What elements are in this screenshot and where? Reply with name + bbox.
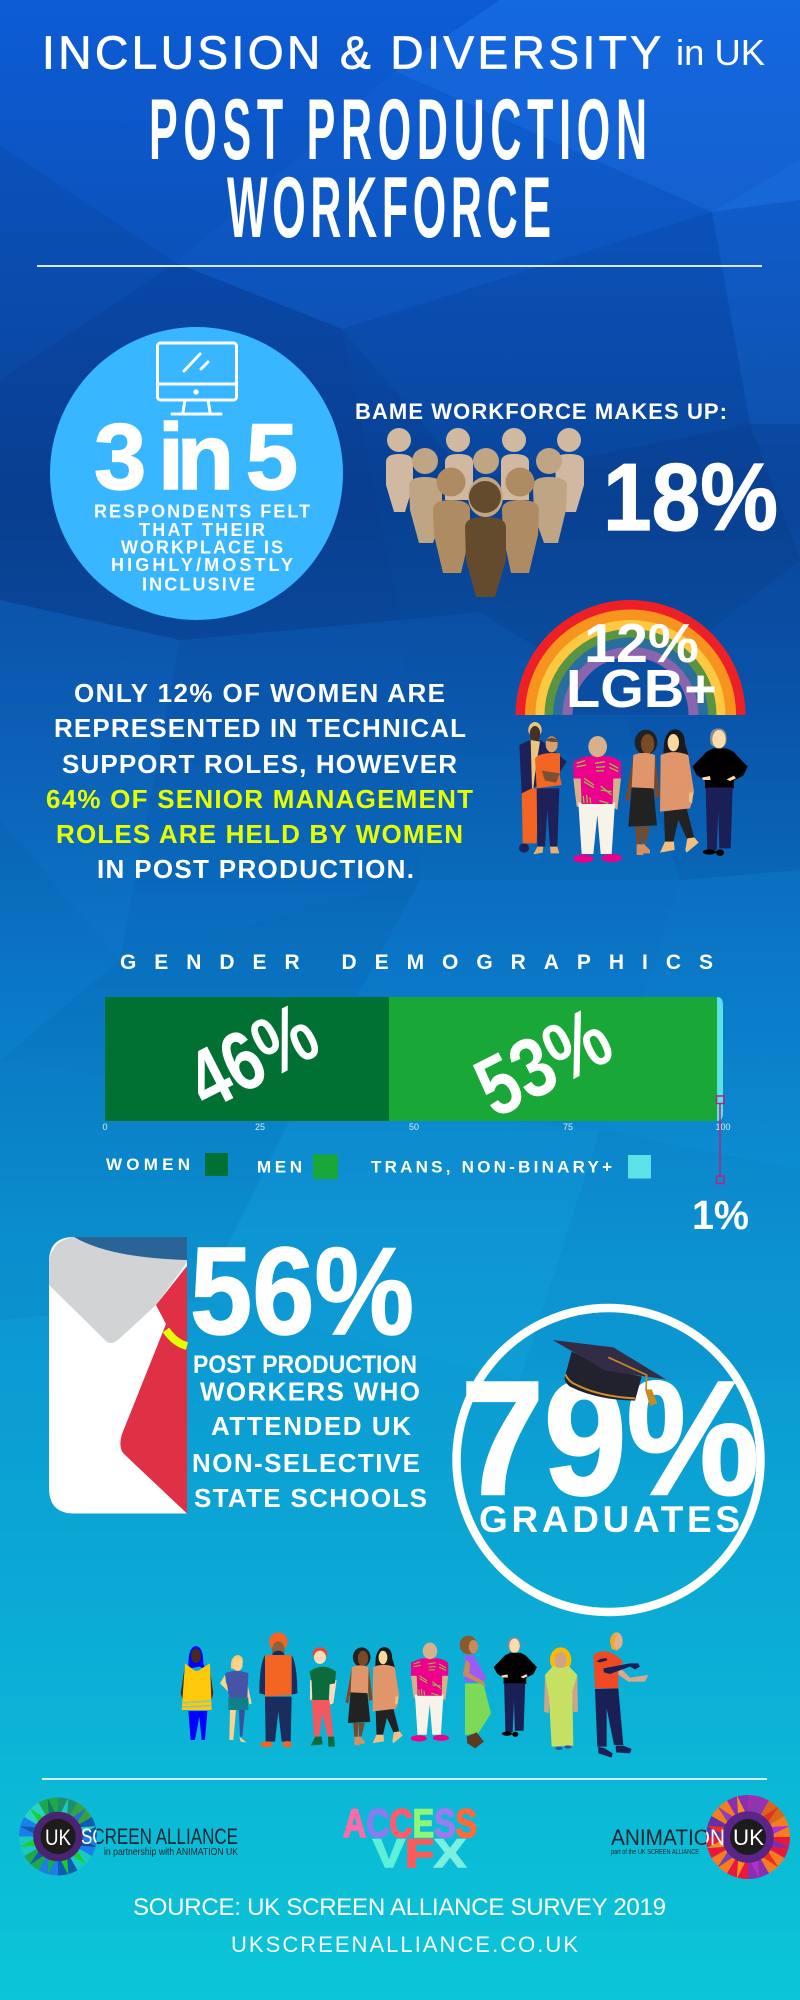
logo: Animation UK (611, 1795, 790, 1879)
legend (106, 1153, 651, 1179)
caption: respondents (94, 502, 310, 594)
heading: gender demographics: GENDER DEMOGRAPHICS (120, 951, 713, 974)
big stat 3 in 5: 3 in 5 (94, 404, 298, 509)
tagline: part of the UK SCREEN ALLIANCE (611, 1849, 699, 1856)
title: post production workforce: POST PRODUCTION (149, 82, 647, 178)
person: man holding baby (533, 736, 562, 854)
person: man with orange turban (259, 1632, 297, 1748)
text block: women in post production: REPRESENTED IN TECHNICAL (54, 713, 466, 743)
ring (456, 1308, 760, 1612)
stat: 79 percent: 79% (461, 1348, 759, 1529)
title: inclusion and diversity in UK: in UK (676, 32, 765, 73)
chart: gender demographics (102, 951, 749, 1238)
axis tick labels: 0 (102, 1122, 108, 1132)
legend: MEN (257, 1158, 302, 1176)
caption: non-selective state schools: NON-SELECTIVE (192, 1448, 420, 1478)
text block: women in post production: 64% OF SENIOR MANAGEMENT (46, 784, 473, 814)
caption: respondents: THAT THEIR (139, 520, 265, 540)
wordmark UK: UK (45, 1825, 71, 1850)
wordmark animation over badge: ANIMATION (611, 1825, 725, 1850)
starburst (19, 1798, 97, 1876)
text block: women in post production: ROLES ARE HELD BY WOMEN (56, 819, 463, 849)
legend: TRANS, NON-BINARY+ (371, 1158, 612, 1176)
icon: computer monitor (158, 343, 236, 414)
wordmark screen alliance: SCREEN ALLIANCE (81, 1824, 238, 1849)
connector: 1 percent callout (716, 1096, 724, 1184)
caption: respondents: HIGHLY/MOSTLY (111, 555, 293, 575)
caption: non-selective state schools: WORKERS WHO (200, 1376, 420, 1406)
text block: women in post production: SUPPORT ROLES, HOWEVER (62, 749, 457, 779)
value: men 53 percent: 53% (460, 989, 626, 1135)
person: girl with prosthetic leg (220, 1655, 252, 1743)
person pair: woman in peach dress (373, 1647, 403, 1743)
text block: women in post production (46, 678, 473, 884)
website: UKSCREENALLIANCE.CO.UK (231, 1932, 578, 1957)
text block: women in post production: IN POST PRODUCTION. (97, 854, 414, 884)
icon: graduation cap (553, 1340, 666, 1406)
person: man in green t-shirt (309, 1647, 337, 1747)
caption: non-selective state schools: POST PRODUCTION (193, 1351, 417, 1379)
light blue circle (50, 327, 343, 620)
stat: 56 percent: 56% (190, 1223, 414, 1361)
person: woman in peach dress (660, 729, 699, 853)
text block: women in post production: ONLY 12% OF WOMEN ARE (74, 678, 445, 708)
caption: non-selective state schools (192, 1351, 427, 1513)
axis tick labels: 25 (255, 1122, 265, 1132)
background low-poly facets (0, 0, 800, 1380)
caption: non-selective state schools: ATTENDED UK (211, 1411, 411, 1441)
wordmark animation: ANIMATION (611, 1825, 725, 1850)
logo: Access VFX: VFX (373, 1832, 466, 1876)
stat: 12 percent LGB+: LGB+ (566, 659, 717, 719)
person: man in suit (519, 722, 567, 853)
heading: BAME: BAME WORKFORCE MAKES UP: (355, 399, 727, 424)
person: woman in lime dress (544, 1647, 578, 1750)
title: post production workforce (149, 82, 647, 256)
illustration: group of six people (519, 722, 748, 863)
person: woman in black sweater (692, 728, 748, 856)
caption: non-selective state schools: STATE SCHOOLS (194, 1483, 427, 1513)
person: pregnant woman (460, 1636, 491, 1748)
wordmark screen alliance over badge: SCREEN ALLIANCE (81, 1824, 238, 1849)
person: woman in black sweater (494, 1637, 537, 1737)
stat: 18 percent: 18% (603, 444, 778, 551)
title: post production workforce: WORKFORCE (227, 160, 551, 256)
logo: UK Screen Alliance (19, 1798, 238, 1876)
caption: respondents: WORKPLACE IS (121, 538, 283, 558)
starburst (706, 1795, 790, 1879)
source line: SOURCE: UK SCREEN ALLIANCE SURVEY 2019 (133, 1894, 666, 1921)
stat: 12 percent LGB+ (566, 612, 717, 719)
stacked bar (105, 997, 723, 1121)
icon: shirt collar and tie (49, 1237, 187, 1514)
person: woman in yellow dress (181, 1646, 213, 1740)
panel: BAME workforce (355, 399, 778, 597)
axis tick labels: 50 (409, 1122, 419, 1132)
caption: respondents: RESPONDENTS FELT (94, 502, 310, 522)
illustration: row of eleven diverse people (181, 1632, 648, 1758)
person: man with prosthetic arm (593, 1632, 648, 1758)
value: women 46 percent: 46% (172, 984, 332, 1128)
wordmark UK: UK (733, 1825, 764, 1850)
stat: 12 percent LGB+: 12% (584, 612, 699, 674)
tagline: in partnership with ANIMATION UK (104, 1847, 238, 1858)
logo: Access VFX (343, 1802, 477, 1876)
logo: Access VFX: ACCESS (343, 1802, 477, 1846)
person pair: women (346, 1647, 373, 1745)
legend: WOMEN (106, 1155, 190, 1174)
panel: LGB+ rainbow and people (516, 600, 748, 863)
person: man in pink shirt (411, 1643, 449, 1741)
icon: crowd of people in skin tones (386, 428, 584, 597)
panel: state schools (49, 1223, 427, 1514)
icon: rainbow (516, 600, 746, 715)
person: woman in black skirt (625, 730, 660, 855)
axis tick labels (102, 1122, 731, 1132)
panel: 3 in 5 inclusive workplace (50, 327, 343, 620)
axis tick labels: 100 (715, 1122, 731, 1132)
person: man in pink shirt (573, 736, 622, 863)
axis tick labels: 75 (563, 1122, 573, 1132)
title: inclusion and diversity in UK: INCLUSION & DIVERSITY (42, 26, 661, 78)
panel: graduates (456, 1308, 760, 1612)
label: graduates: GRADUATES (479, 1499, 740, 1540)
value: 1 percent: 1% (692, 1192, 749, 1238)
caption: respondents: INCLUSIVE (142, 574, 255, 594)
